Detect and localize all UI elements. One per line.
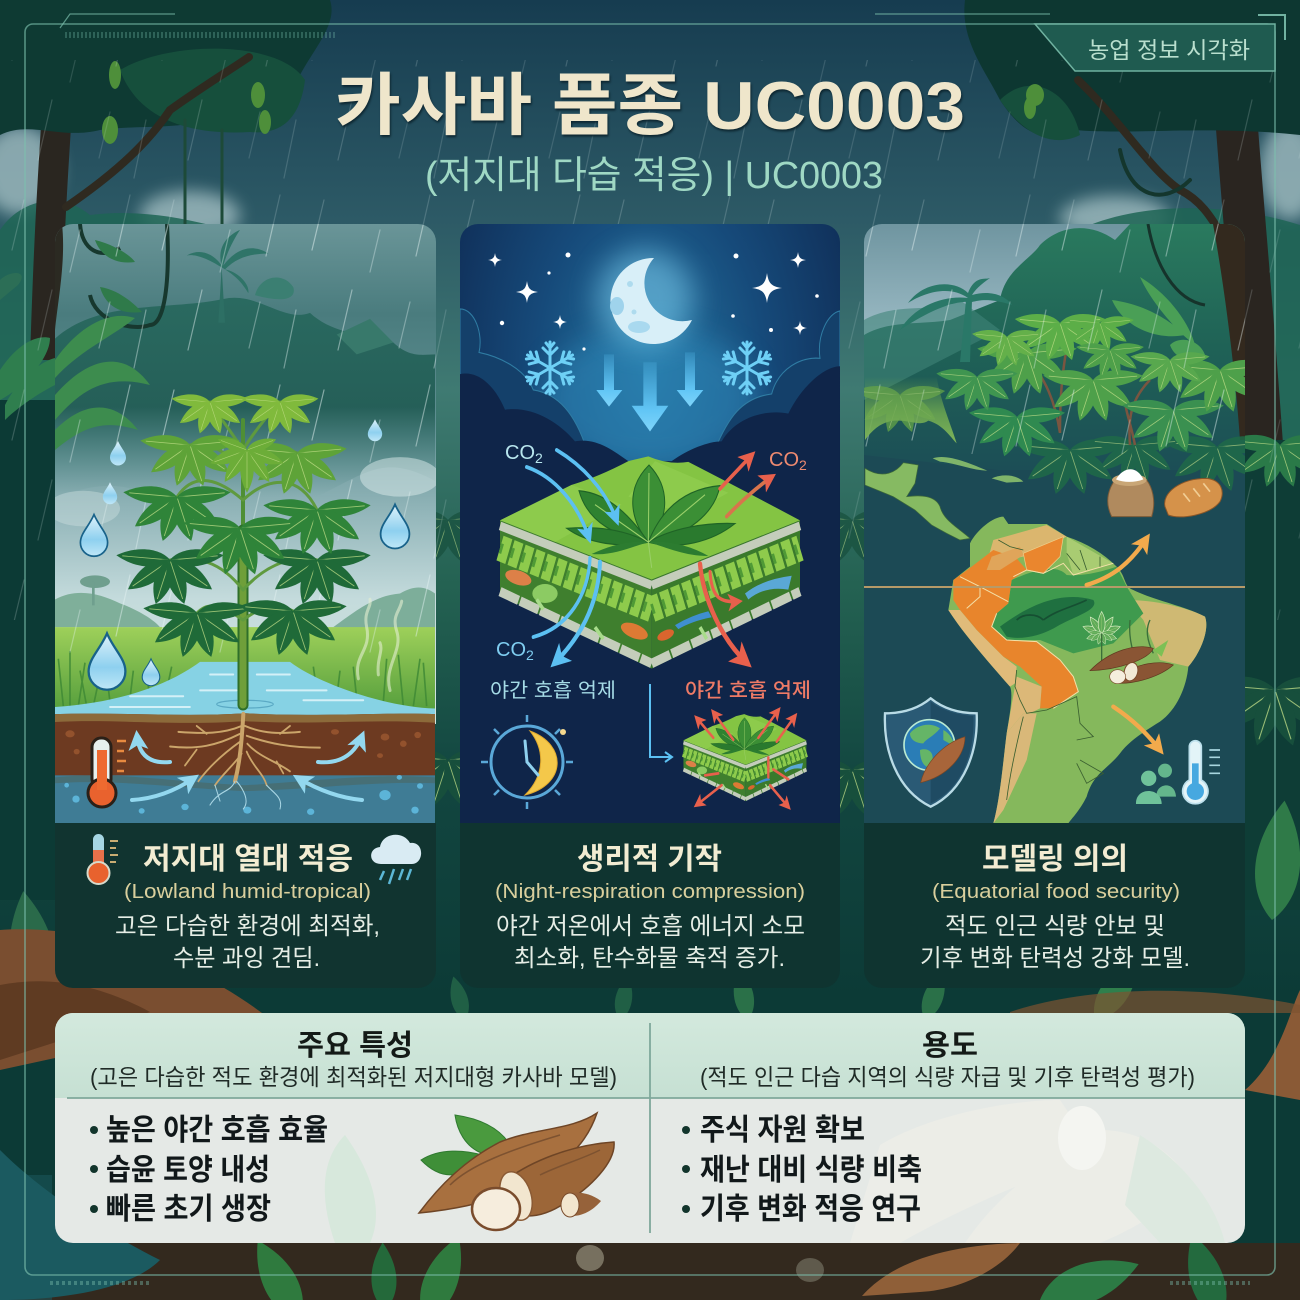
leaf cross-section block — [500, 450, 800, 669]
label: CO2 lower: 2 — [526, 647, 534, 663]
heading: key traits: 주요 특성 — [297, 1029, 413, 1062]
plant stem and branches — [170, 402, 317, 705]
plant leaves — [116, 393, 371, 660]
small leaf block with radiating arrows — [683, 710, 806, 807]
icon: crescent moon — [597, 250, 693, 346]
subheading: mechanism: (Night-respiration compression) — [495, 881, 805, 903]
South America landmass — [948, 517, 1206, 823]
heading: uses: 용도 — [922, 1030, 978, 1062]
panel: modelling significance — [854, 224, 1272, 988]
bullet list: key traits: 빠른 초기 생장 — [106, 1193, 271, 1226]
label: CO2 in: CO — [505, 442, 535, 464]
North America and Caribbean — [865, 377, 1023, 540]
illustration: forest and South America map — [854, 224, 1272, 825]
icon: night clock — [481, 715, 573, 809]
panel: physiological mechanism — [460, 224, 840, 988]
bullet list: key traits — [90, 1114, 328, 1226]
tag: 농업 정보 시각화: 농업 정보 시각화 — [1088, 37, 1250, 63]
label: night respiration blue: 야간 호흡 억제 — [490, 679, 616, 702]
icon: thermometer in soil — [88, 738, 126, 807]
label: CO2 out: CO — [769, 449, 799, 471]
bullet list: uses: 기후 변화 적응 연구 — [700, 1193, 921, 1226]
illustration: cassava roots — [419, 1113, 614, 1230]
body text: mechanism — [496, 913, 805, 972]
panel: summary table — [55, 1013, 1245, 1243]
background: branches and vines — [66, 57, 1225, 240]
tag: 농업 정보 시각화 — [1035, 24, 1275, 71]
icon: shield with globe and cassava — [885, 698, 977, 807]
background: soil and leaves — [0, 1150, 1300, 1300]
icon: thermometer — [88, 834, 118, 884]
palm silhouette — [900, 278, 1012, 362]
background: side foliage — [0, 273, 1300, 1033]
bullet list: uses: 재난 대비 식량 비축 — [700, 1154, 922, 1187]
background: cassava roots — [0, 929, 1300, 1100]
background: tree canopy — [0, 0, 1300, 144]
heading: lowland: 저지대 열대 적응 — [143, 843, 353, 876]
arrows: food and climate outcomes — [1087, 538, 1160, 750]
bullet list: uses — [682, 1114, 922, 1226]
body text: modelling: 적도 인근 식량 안보 및 — [945, 913, 1165, 940]
body text: lowland — [115, 913, 380, 972]
icon: community and thermometer — [1136, 741, 1220, 804]
body text: mechanism: 야간 저온에서 호흡 에너지 소모 — [496, 913, 805, 940]
body text: lowland: 고은 다습한 환경에 최적화, — [115, 913, 380, 940]
roots — [170, 714, 320, 809]
bullet list: uses: 주식 자원 확보 — [700, 1114, 865, 1147]
column: key traits — [90, 1029, 617, 1226]
card: lowland text — [55, 823, 436, 988]
label: night respiration red: 야간 호흡 억제 — [685, 679, 811, 702]
equator line — [864, 586, 1245, 588]
body text: lowland: 수분 과잉 견딤. — [173, 945, 320, 972]
card: mechanism text — [460, 823, 840, 988]
title: 카사바 품종 UC0003 — [335, 68, 965, 144]
panel: lowland adaptation — [47, 224, 440, 988]
illustration: rainy lowland cassava plant — [47, 224, 440, 825]
banana leaves and tree trunk — [1112, 224, 1245, 440]
heading: modelling: 모델링 의의 — [982, 843, 1128, 876]
bullet list: key traits: 습윤 토양 내성 — [106, 1154, 270, 1187]
subheading: key traits: (고은 다습한 적도 환경에 최적화된 저지대형 카사바 모델) — [90, 1064, 617, 1090]
banana leaves and vine — [55, 224, 168, 450]
background: misty clouds — [0, 120, 1300, 240]
body text: mechanism: 최소화, 탄수화물 축적 증가. — [514, 945, 785, 972]
body text: modelling: 기후 변화 탄력성 강화 모델. — [920, 945, 1190, 972]
subheading: uses: (적도 인근 다습 지역의 식량 자급 및 기후 탄력성 평가) — [700, 1064, 1195, 1090]
forest silhouette — [864, 224, 1245, 470]
heading: mechanism: 생리적 기작 — [577, 843, 722, 876]
column: uses — [682, 1030, 1195, 1226]
card: modelling text — [864, 823, 1245, 988]
label: CO2 out: 2 — [799, 457, 807, 473]
label: CO2 in: 2 — [535, 450, 543, 466]
faint cassava watermark — [850, 1100, 1225, 1243]
icon: flour sack and bread — [1108, 469, 1222, 517]
water droplets — [80, 419, 409, 690]
icon: snowflakes — [524, 342, 773, 394]
icon: rain cloud — [371, 835, 421, 884]
arrow: down to small block — [650, 684, 672, 762]
subtitle: (저지대 다습 적응) | UC0003 — [425, 155, 883, 197]
body text: modelling — [920, 913, 1190, 972]
crop marker on map — [1082, 612, 1173, 684]
bullet list: key traits: 높은 야간 호흡 효율 — [106, 1114, 328, 1147]
background: tree trunks — [45, 60, 1262, 445]
illustration: night sky — [460, 224, 840, 825]
subheading: modelling: (Equatorial food security) — [932, 881, 1180, 903]
subheading: lowland: (Lowland humid-tropical) — [124, 881, 371, 903]
label: CO2 lower: CO — [496, 639, 526, 661]
cold air arrows — [596, 352, 703, 431]
CO2 flow arrows — [527, 450, 772, 663]
cassava plants — [936, 314, 1245, 456]
water movement arrows — [132, 736, 362, 800]
